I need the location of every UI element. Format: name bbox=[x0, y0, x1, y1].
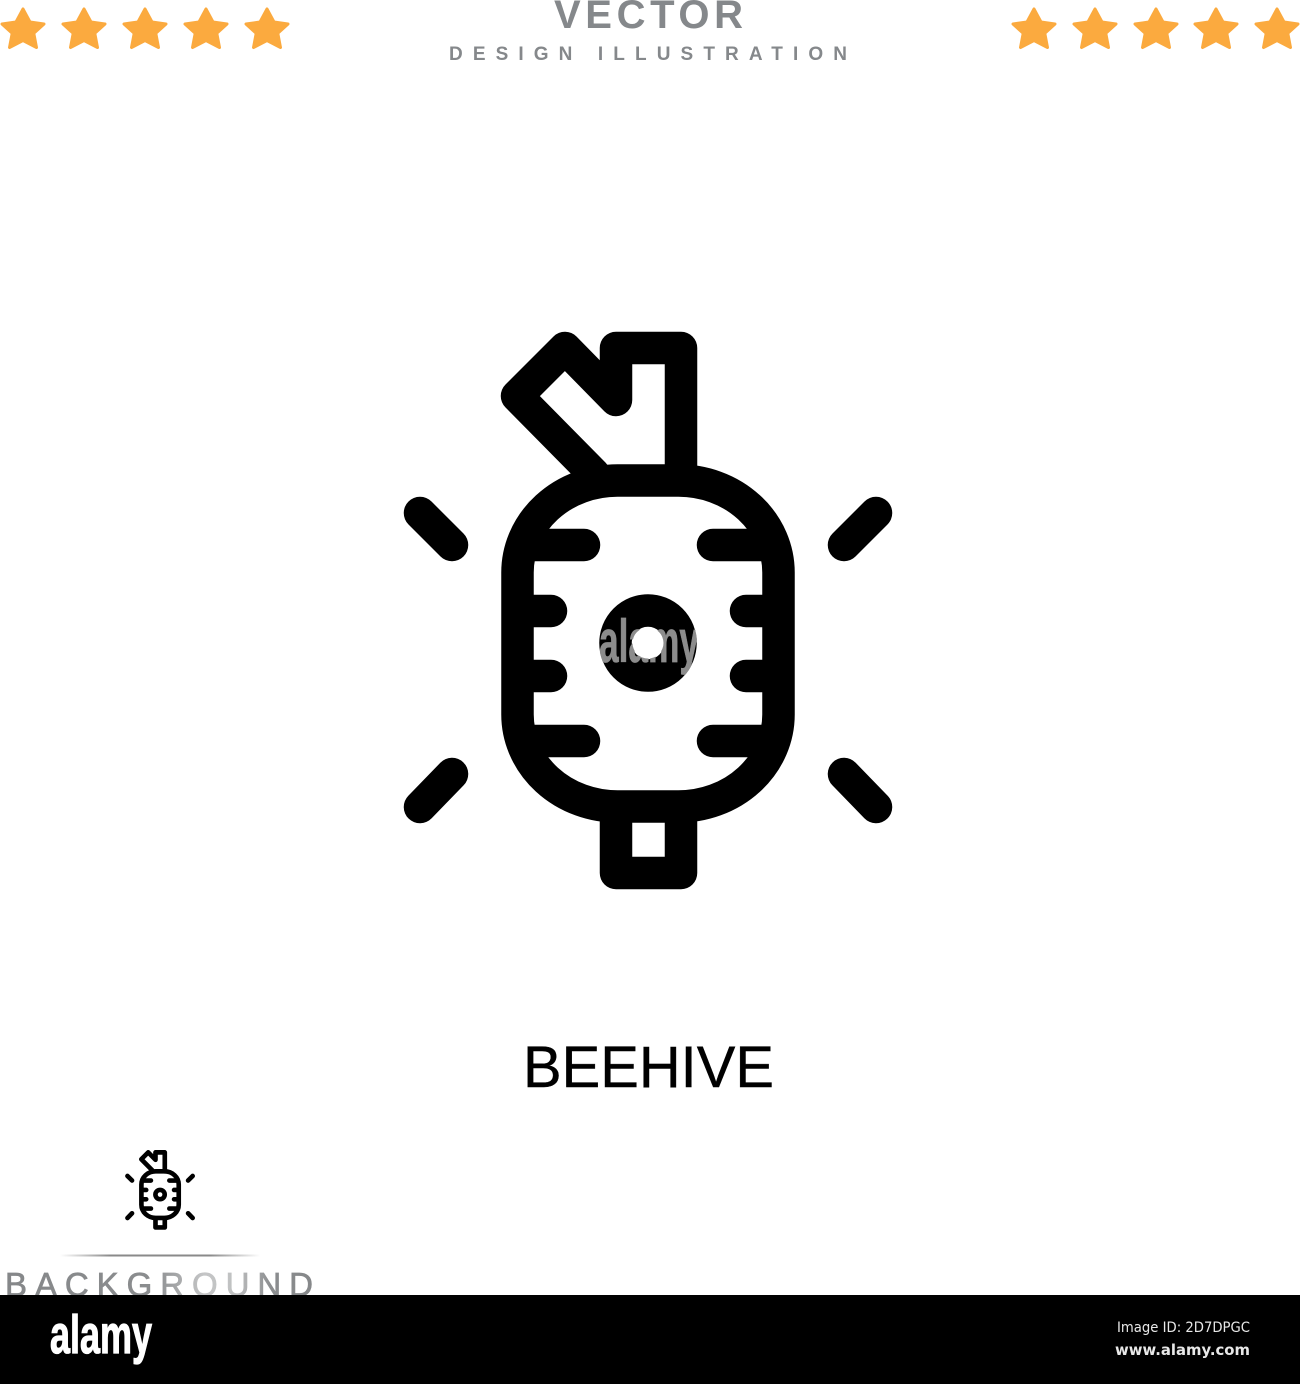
icon title: BEEHIVE: BEEHIVE bbox=[523, 1035, 774, 1100]
watermark on icon: alamy bbox=[599, 608, 699, 675]
branch bbox=[517, 348, 681, 480]
alamy logo: alamy bbox=[50, 1305, 152, 1365]
image id: Image ID: 2D7DPGC bbox=[1117, 1320, 1250, 1336]
icon: beehive large bbox=[420, 348, 876, 873]
label: BACKGROUND: BACKGROUND bbox=[5, 1266, 313, 1303]
website: www.alamy.com bbox=[1115, 1341, 1250, 1359]
bottom peg bbox=[616, 807, 681, 873]
right star rating bbox=[1013, 9, 1298, 48]
hive body bbox=[518, 480, 778, 806]
comb bars bbox=[533, 545, 763, 741]
hive entrance bbox=[616, 610, 680, 676]
footer bar bbox=[0, 1295, 1300, 1384]
divider line bbox=[60, 1254, 260, 1256]
watermark on icon bbox=[600, 618, 697, 675]
left star rating bbox=[2, 9, 288, 48]
icon: beehive small bbox=[127, 1152, 193, 1227]
rays bbox=[420, 513, 876, 807]
subheading: DESIGN ILLUSTRATION: DESIGN ILLUSTRATION bbox=[449, 44, 847, 65]
